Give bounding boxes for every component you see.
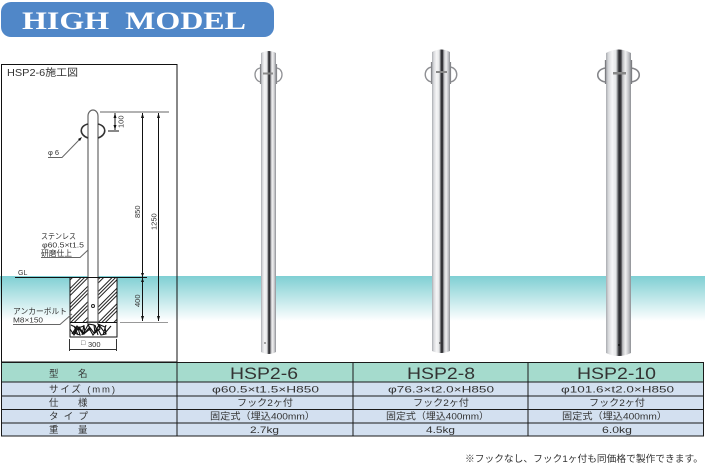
column: HSP2-10: 6.0kg — [602, 425, 632, 436]
anchor bolt callout — [13, 307, 72, 324]
column: HSP2-8: フック2ヶ付 — [413, 398, 470, 409]
stainless callout: 研磨仕上 — [41, 248, 72, 258]
product photo: HSP2-8 — [425, 50, 457, 353]
stainless callout: φ60.5×t1.5 — [42, 240, 84, 250]
column: HSP2-8: HSP2-8 — [407, 364, 475, 383]
anchor bolt callout: M8×150 — [13, 316, 43, 324]
column: HSP2-6: 固定式（埋込400mm） — [210, 410, 315, 422]
hook diameter callout — [48, 137, 82, 158]
teal ground band — [0, 276, 705, 321]
footnote: ※フックなし、フック1ヶ付も同価格で製作できます。 — [465, 453, 703, 465]
bollard section drawing — [70, 110, 117, 337]
dimension 400: 400 — [133, 294, 142, 307]
dimension 1250: 1250 — [150, 213, 158, 230]
column: HSP2-10: フック2ヶ付 — [589, 398, 646, 409]
stainless callout: ステンレス — [41, 232, 76, 241]
row labels — [49, 368, 115, 436]
dimension lines — [100, 112, 169, 322]
panel: construction drawing — [2, 64, 177, 362]
panel: construction drawing: GL — [18, 270, 27, 277]
row labels: タイプ — [49, 412, 88, 422]
drawing title: HSP2-6施工図 — [7, 66, 78, 79]
column: HSP2-6: 2.7kg — [250, 425, 279, 436]
product photo: HSP2-10 — [598, 50, 639, 356]
row labels: サイズ (mm) — [49, 384, 115, 396]
column: HSP2-6: HSP2-6 — [230, 364, 298, 383]
row labels: 仕 — [49, 397, 59, 409]
dimension 850: 850 — [133, 205, 142, 218]
specification table — [1, 362, 704, 436]
column: HSP2-10 — [561, 364, 674, 436]
row labels: 名 — [78, 368, 88, 380]
base width dimension: 300 — [88, 340, 101, 349]
row labels: 量 — [78, 425, 88, 436]
dimension 100: 100 — [116, 115, 126, 128]
column: HSP2-10: HSP2-10 — [577, 364, 656, 383]
column: HSP2-6: φ60.5×t1.5×H850 — [212, 384, 319, 396]
column: HSP2-10: 固定式（埋込400mm） — [562, 410, 667, 422]
title banner: HIGH MODEL — [22, 8, 246, 35]
title banner — [1, 2, 274, 37]
column: HSP2-8: 固定式（埋込400mm） — [386, 410, 489, 422]
base width dimension: □ — [81, 340, 86, 347]
column: HSP2-8 — [386, 364, 494, 436]
base width dimension — [70, 339, 116, 351]
hook diameter callout: φ6 — [48, 148, 59, 157]
row labels: 重 — [49, 424, 59, 436]
anchor bolt callout: アンカーボルト — [13, 307, 67, 316]
ground line — [15, 276, 147, 278]
stainless callout — [41, 232, 88, 258]
row labels: 様 — [78, 397, 88, 409]
column: HSP2-8: φ76.3×t2.0×H850 — [388, 384, 494, 396]
column: HSP2-6 — [210, 364, 319, 436]
column: HSP2-6: フック2ヶ付 — [237, 398, 294, 409]
column: HSP2-10: φ101.6×t2.0×H850 — [561, 384, 674, 396]
product photo: HSP2-6 — [255, 51, 282, 354]
column: HSP2-8: 4.5kg — [426, 425, 455, 436]
row labels: 型 — [49, 369, 59, 380]
